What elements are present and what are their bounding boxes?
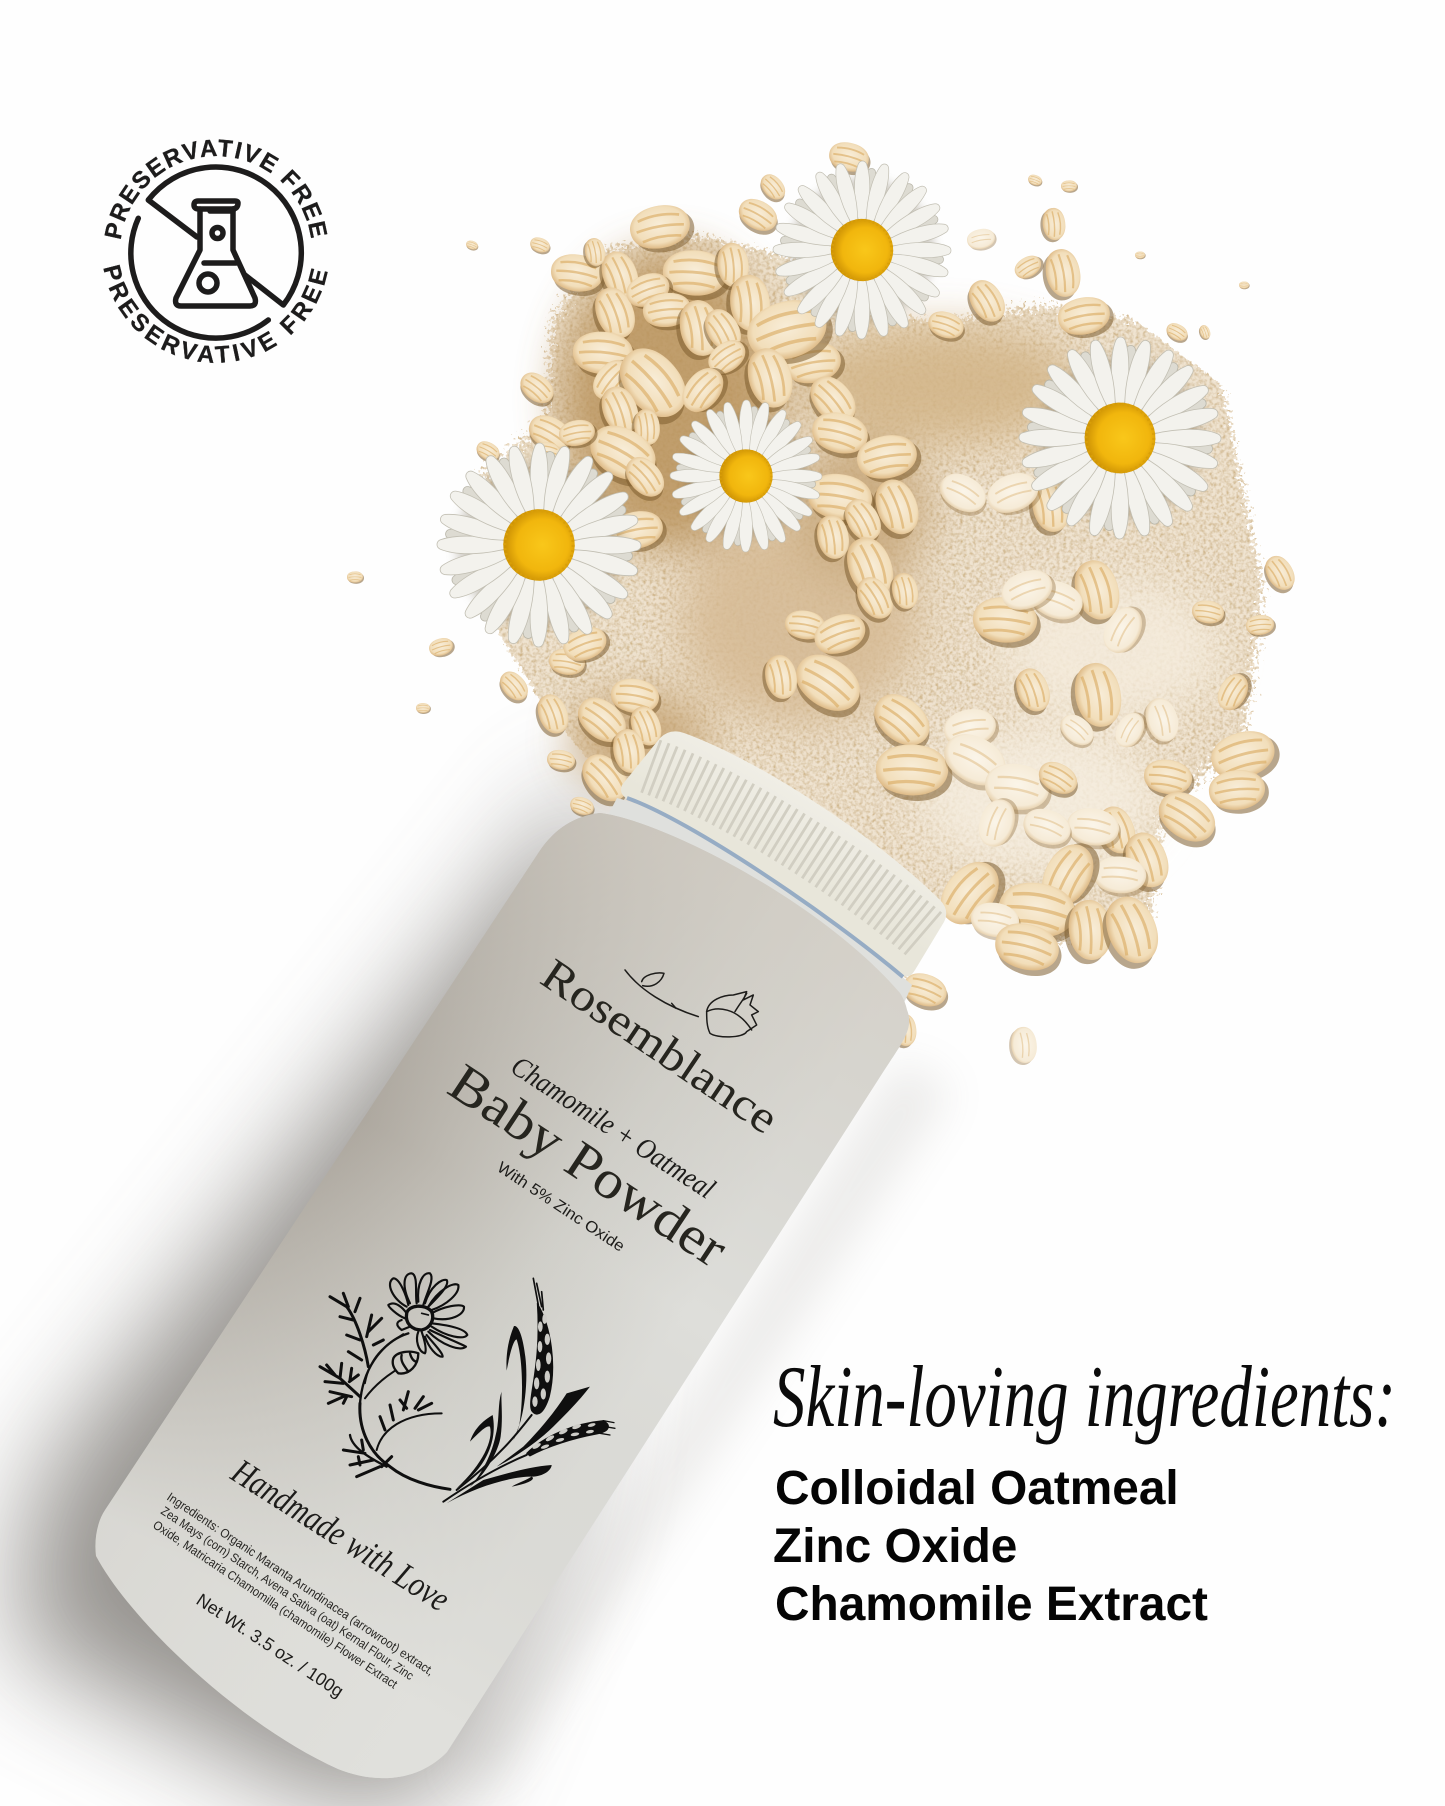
- ingredients list: Oxide, Matricaria Chamomilla (chamomile) Flower Extract: [150, 1518, 400, 1692]
- oat flakes: [347, 138, 1301, 1066]
- ingredients callout: [773, 1349, 1396, 1631]
- chamomile flower: [388, 1273, 467, 1357]
- brand name: Rosemblance: [532, 949, 788, 1144]
- callout list: Colloidal Oatmeal: [775, 1462, 1179, 1515]
- powder tonal shading: [560, 250, 1220, 870]
- blue neck line: [627, 798, 903, 977]
- chamomile daisies: [437, 161, 1221, 647]
- zinc oxide note: With 5% Zinc Oxide: [494, 1159, 628, 1256]
- handmade tagline: Handmade with Love: [224, 1451, 457, 1619]
- callout list: Zinc Oxide: [773, 1520, 1017, 1573]
- net weight: Net Wt. 3.5 oz. / 100g: [193, 1590, 347, 1701]
- callout list: [773, 1462, 1208, 1631]
- ingredients list: Zea Mays (corn) Starch, Avena Sativa (oat) Kernal Flour, Zinc: [158, 1504, 416, 1683]
- botanical illustration: chamomile and wheat: [320, 1273, 615, 1503]
- script subtitle: Chamomile + Oatmeal: [505, 1050, 721, 1205]
- ingredients list: Ingredients: Organic Maranta Arundinacea (arrowroot) extract,: [164, 1490, 436, 1678]
- badge text: bottom arc: PRESERVATIVE FREE: [103, 264, 328, 364]
- icon: flask: [176, 201, 255, 306]
- wheat ear: side: [527, 1421, 615, 1456]
- bottle neck: [600, 798, 912, 1012]
- daisy: top: [773, 161, 951, 339]
- badge ring and strike: [131, 167, 301, 338]
- bottle drop shadow: [10, 770, 950, 1806]
- main stem: [360, 1333, 408, 1403]
- daisy: right: [1019, 337, 1221, 539]
- daisy: left: [437, 443, 641, 647]
- badge text: top arc: PRESERVATIVE FREE: [104, 139, 328, 239]
- oat and powder pile: [347, 138, 1301, 1066]
- callout list: Chamomile Extract: [775, 1578, 1208, 1631]
- brand logo: leaf and tulip: [625, 970, 758, 1037]
- bottle cap: [621, 731, 946, 977]
- wheat ear: upright: [531, 1278, 553, 1414]
- product name: Baby Powder: [438, 1052, 738, 1279]
- powder bottle: [95, 731, 946, 1778]
- flower bud: [365, 1352, 418, 1398]
- bottle body: [95, 813, 909, 1778]
- preservative free badge: [103, 139, 328, 364]
- powder base: [476, 235, 1263, 977]
- feathery leaves: [320, 1293, 442, 1477]
- daisy: middle: [670, 400, 822, 552]
- wheat stems and leaves: [443, 1415, 532, 1502]
